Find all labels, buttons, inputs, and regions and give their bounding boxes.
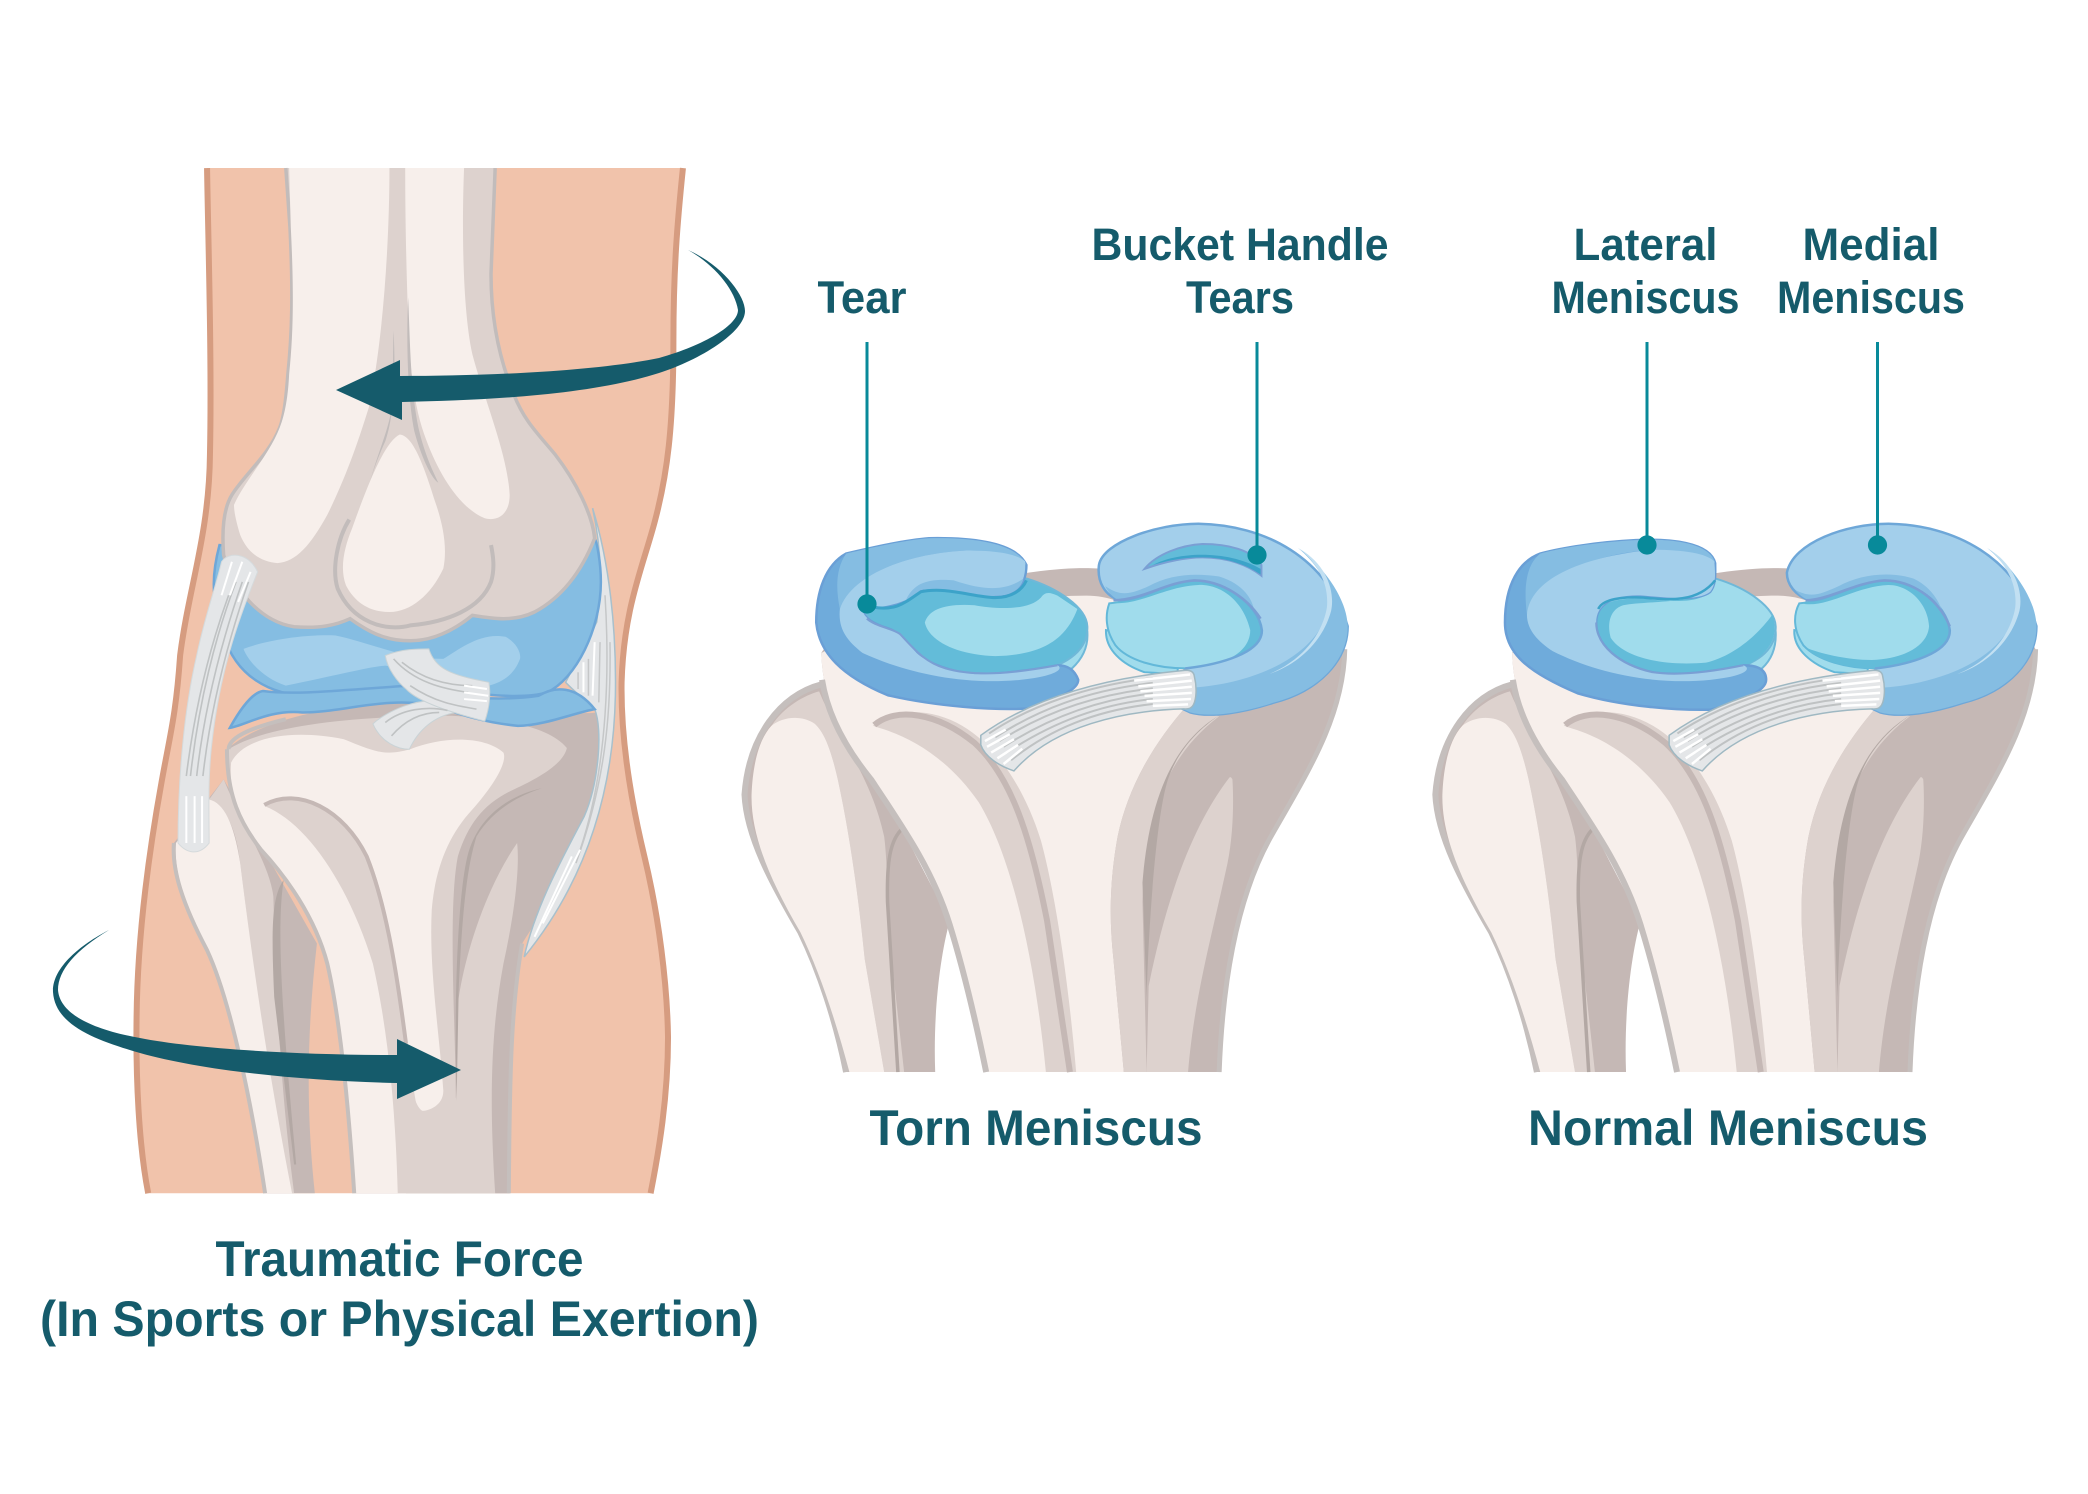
label: bucket handle tears: Tears — [1186, 272, 1294, 323]
transverse ligament — [981, 670, 1196, 771]
label: lateral meniscus — [1552, 219, 1740, 323]
femur — [223, 168, 595, 641]
tibia plateau — [745, 568, 1345, 1072]
skin — [136, 168, 683, 1193]
panel: torn meniscus — [745, 219, 1388, 1156]
label: bucket handle tears — [1092, 219, 1388, 323]
torn meniscus illustration — [745, 524, 1348, 1072]
leader: lateral meniscus — [1637, 342, 1657, 555]
caption: traumatic force: (In Sports or Physical Exertion) — [40, 1291, 759, 1347]
medial cartilage — [1794, 580, 1950, 674]
medial meniscus with bucket handle tear — [1099, 524, 1348, 715]
tibia — [227, 702, 600, 1193]
knee illustration — [136, 168, 683, 1193]
label: bucket handle tears: Bucket Handle — [1092, 219, 1388, 270]
fibula — [174, 779, 317, 1193]
arrow: lower traumatic force — [53, 930, 461, 1099]
lateral ligament — [524, 508, 616, 957]
caption: traumatic force: Traumatic Force — [216, 1231, 584, 1287]
panel: normal meniscus — [1435, 219, 2036, 1156]
label: medial meniscus: Medial — [1802, 219, 1940, 270]
label: medial meniscus: Meniscus — [1777, 272, 1965, 323]
tibia plateau — [1435, 568, 2036, 1072]
medial ligament — [178, 555, 258, 852]
lateral cartilage — [863, 577, 1087, 682]
caption: torn meniscus: Torn Meniscus — [870, 1100, 1202, 1156]
lateral cartilage — [1596, 578, 1776, 680]
panel: traumatic force knee — [40, 168, 759, 1347]
caption: traumatic force — [40, 1231, 759, 1347]
medial meniscus — [1787, 524, 2036, 715]
label: lateral meniscus: Meniscus — [1552, 272, 1740, 323]
caption: normal meniscus: Normal Meniscus — [1528, 1100, 1928, 1156]
label: tear: Tear — [818, 272, 906, 323]
arrow: upper traumatic force — [336, 250, 745, 420]
leader: bucket handle tears — [1247, 342, 1267, 565]
normal meniscus illustration — [1435, 524, 2036, 1072]
lateral meniscus with tear — [816, 538, 1078, 709]
transverse ligament — [1669, 670, 1884, 771]
lateral meniscus — [1505, 540, 1766, 710]
leader: tear — [857, 342, 877, 614]
skin outline — [136, 168, 683, 1193]
label: medial meniscus — [1777, 219, 1965, 323]
cruciate ligaments — [373, 649, 490, 749]
meniscus — [214, 538, 601, 728]
medial cartilage — [1106, 580, 1262, 674]
label: lateral meniscus: Lateral — [1574, 219, 1718, 270]
leader: medial meniscus — [1868, 342, 1887, 555]
